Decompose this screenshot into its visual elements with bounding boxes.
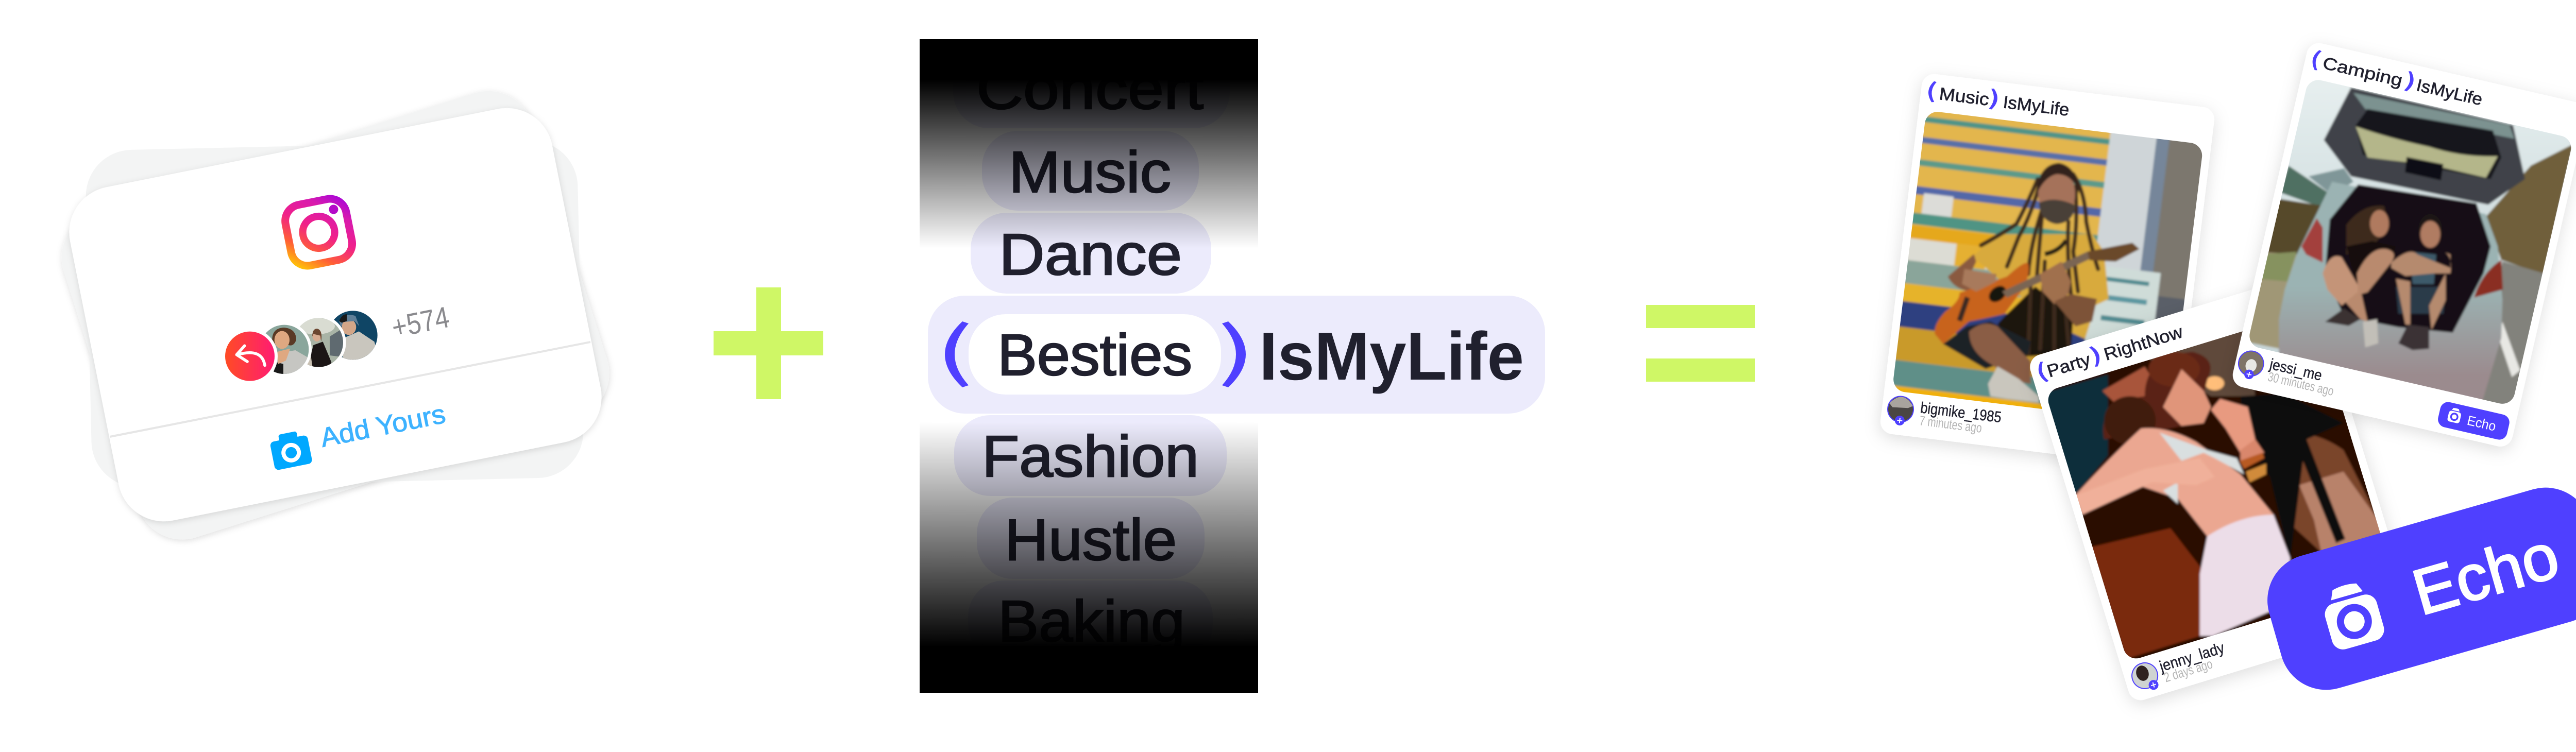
card title and user row: [2036, 319, 2280, 695]
icon: white camera: [2318, 578, 2387, 652]
username: bigmike_1985: [1920, 399, 2002, 426]
post card: Party RightNow: [2027, 272, 2414, 703]
photo: guitarist on tiled steps: [1893, 112, 2202, 409]
bracket close: [1989, 88, 1998, 110]
small Echo button: Echo: [2466, 413, 2498, 434]
avatar ring 2: [291, 315, 346, 370]
option: Baking: Baking: [998, 589, 1185, 654]
bracket close: [2089, 345, 2102, 367]
bracket close: [2404, 71, 2416, 92]
right bracket: [1222, 321, 1246, 387]
photo: women dancing at party: [2048, 331, 2380, 658]
avatar: woman in floral dress: [300, 318, 343, 367]
option: Baking: [968, 580, 1213, 661]
option: Fashion: Fashion: [982, 424, 1199, 489]
prompt word: Music: [1938, 84, 1990, 110]
option: Concert: [953, 49, 1230, 128]
prompt word: Party: [2045, 350, 2093, 381]
option: Hustle: [977, 498, 1205, 579]
option: Fashion: [954, 415, 1227, 496]
icon: blue camera: [268, 429, 313, 471]
icon: Instagram logo: [282, 196, 355, 269]
equals sign: [1646, 305, 1755, 382]
title suffix: IsMyLife: [2002, 92, 2071, 120]
card background: [1879, 73, 2216, 468]
back card tilted most: [50, 79, 621, 551]
avatar: jessi: [2235, 349, 2266, 382]
username: jessi_me: [2267, 356, 2324, 384]
option: Music: Music: [1009, 140, 1171, 204]
icon: red reply badge: [225, 332, 275, 381]
black fade mask: [920, 39, 1258, 693]
button label: Echo: [2405, 520, 2566, 629]
big Echo button: [2257, 476, 2576, 701]
username: jenny_lady: [2157, 639, 2227, 675]
button background: [2257, 476, 2576, 701]
card title and user row: [1886, 80, 2071, 441]
title suffix: IsMyLife: [2415, 76, 2484, 109]
main white sticker card: [61, 100, 609, 529]
participant avatars with reply badge: [222, 311, 378, 384]
option: Dance: Dance: [999, 222, 1182, 287]
picker background: [920, 39, 1258, 693]
card background: [2027, 272, 2414, 703]
option: Concert: Concert: [976, 56, 1204, 121]
selected prompt bar: [928, 296, 1545, 414]
avatar ring 1: [257, 322, 312, 377]
panel: scrolling prompt picker: [920, 39, 1545, 693]
card background: [2230, 41, 2576, 449]
option: Dance: [971, 213, 1211, 294]
IsMyLife suffix: IsMyLife: [1259, 318, 1524, 394]
Add Yours label: Add Yours: [318, 399, 448, 453]
selected option pill: [969, 314, 1221, 395]
timestamp: 7 minutes ago: [1919, 413, 1983, 436]
selected option: Besties: Besties: [997, 322, 1192, 387]
avatar ring: reply badge: [222, 329, 278, 384]
card divider: [110, 342, 590, 437]
option: Music: [982, 131, 1199, 211]
title suffix: RightNow: [2102, 322, 2185, 365]
small Echo button: [2436, 400, 2511, 441]
panel: Instagram Add Yours card stack: [50, 79, 621, 551]
left bracket: [945, 321, 969, 387]
bracket open: [2311, 49, 2321, 71]
bracket open: [2036, 361, 2049, 383]
card title, user row and button: [2234, 48, 2576, 441]
timestamp: 30 minutes ago: [2266, 370, 2335, 399]
plus sign: [714, 287, 823, 399]
reply arrow: [236, 346, 265, 365]
post card: Music IsMyLife: [1879, 73, 2216, 468]
option: Hustle: Hustle: [1005, 507, 1177, 572]
post card: Camping IsMyLife: [2230, 41, 2576, 449]
photo: friends in car boot: [2249, 80, 2571, 404]
avatar: bigmike: [1886, 395, 1915, 427]
panel: Echo result posts: [1879, 41, 2576, 703]
avatar: smiling woman: [266, 324, 309, 374]
bracket open: [1927, 81, 1937, 102]
timestamp: 2 days ago: [2162, 656, 2214, 685]
avatar: jenny: [2129, 660, 2162, 695]
prompt word: Camping: [2321, 54, 2404, 91]
avatar: man in cap: [334, 311, 378, 360]
participant count: +574: [389, 300, 452, 345]
back card nearly level: [85, 140, 584, 488]
